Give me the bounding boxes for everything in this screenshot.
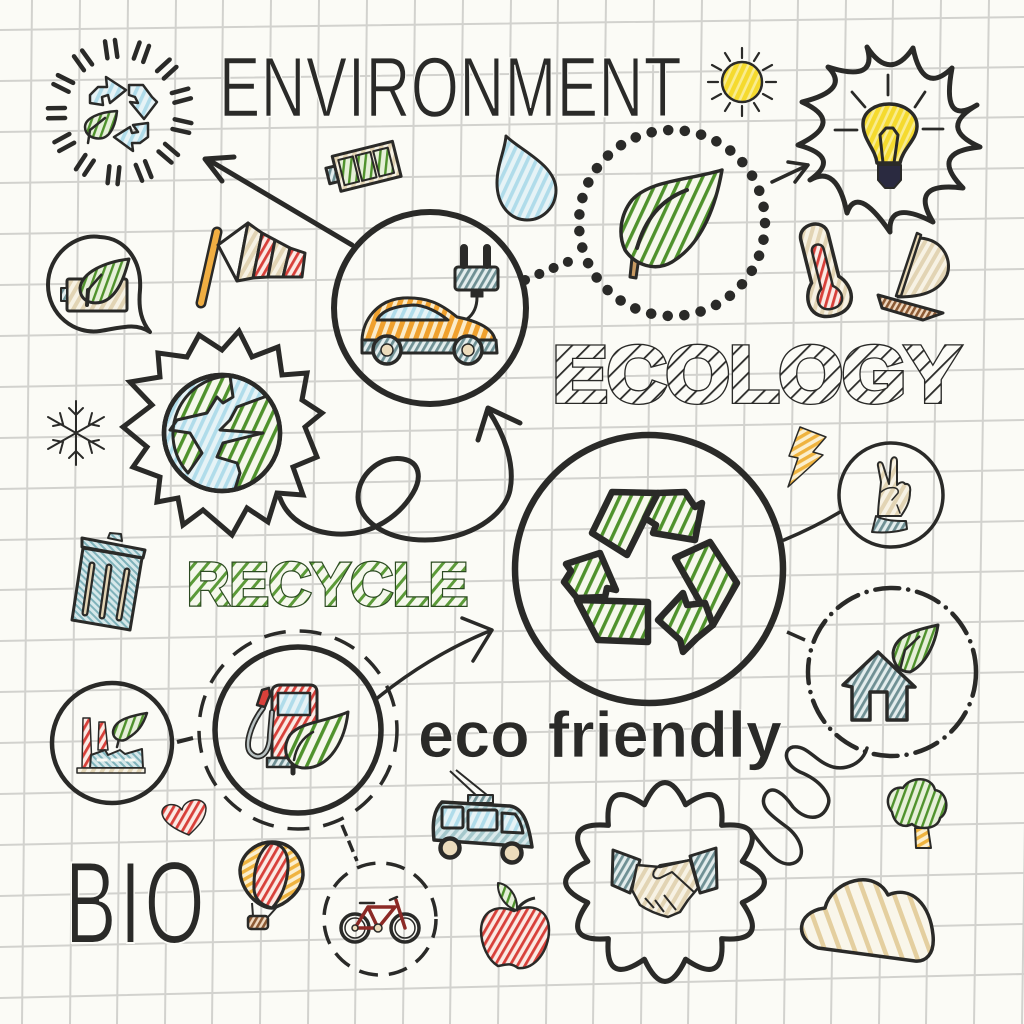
- dashed connector: recycle to house: [787, 632, 805, 640]
- icon: hot air balloon: [240, 842, 303, 929]
- dashed halo: [199, 631, 397, 829]
- dashed connector: fuel to bicycle: [342, 825, 357, 861]
- icon: heart: [162, 800, 206, 835]
- dashed connector: factory to fuel: [177, 738, 193, 742]
- icon: thermometer: [790, 219, 855, 321]
- arrow: fuel to recycle: [375, 618, 492, 700]
- title: RECYCLE: RECYCLE: [187, 551, 468, 618]
- icon: tree: [888, 779, 946, 848]
- burst outline: [798, 47, 980, 232]
- icon: cloud: [802, 880, 933, 961]
- left cuff: [612, 850, 640, 893]
- icon: windsock: [201, 223, 305, 303]
- wavy connector: house to handshake: [750, 747, 867, 864]
- icon: light bulb in burst: [798, 47, 980, 232]
- dashed circle with house: [808, 588, 976, 756]
- icon: trash can: [72, 533, 145, 630]
- circle with electric car: [334, 212, 526, 404]
- gear outline with handshake: [566, 783, 764, 981]
- circle with factory: [52, 683, 172, 803]
- circle with peace hand: [839, 443, 943, 547]
- bulb rays: [835, 75, 943, 130]
- plug: [455, 248, 498, 319]
- icon: sailboat: [878, 233, 949, 320]
- looping arrow from earth to car: [280, 408, 520, 540]
- eco friendly heading: eco friendly: [418, 698, 782, 771]
- small recycle arrows and leaf: [85, 77, 157, 151]
- bulb: [863, 104, 917, 163]
- ring of dashes: [48, 40, 191, 184]
- car body: [362, 298, 495, 340]
- leaf on house: [893, 625, 938, 672]
- icon: recycle ring top-left: [48, 40, 191, 184]
- dotted connector: car to leaf: [525, 261, 570, 280]
- icon: trolley bus: [433, 770, 532, 862]
- recycle arrows: [564, 492, 737, 652]
- car wheels: [373, 336, 401, 364]
- dotted circle with leaf: [579, 130, 765, 316]
- big circle with recycle symbol: [515, 435, 783, 703]
- house: [843, 652, 915, 720]
- right cuff: [690, 848, 717, 893]
- title: ECOLOGY: ECOLOGY: [553, 330, 960, 418]
- fuel pump: [272, 685, 317, 758]
- connector: recycle to hand: [784, 512, 840, 540]
- bicycle: [341, 914, 369, 942]
- icon: earth in spiked burst: [123, 331, 322, 535]
- heading: BIO: BIO: [65, 838, 208, 969]
- title: ECOLOGY: ECOLOGY: [553, 330, 960, 418]
- arrow to environment icon: [205, 157, 352, 245]
- icon: apple: [481, 883, 549, 968]
- leaf on pump: [290, 757, 296, 773]
- icon: snowflake: [48, 401, 104, 465]
- title: RECYCLE: RECYCLE: [187, 551, 468, 618]
- icon: sun: [708, 48, 776, 116]
- leaf: [621, 170, 722, 278]
- icon: speech bubble with battery leaf: [48, 237, 150, 332]
- hands: [632, 860, 698, 917]
- factory building: [82, 718, 92, 768]
- icon: battery: [324, 141, 401, 193]
- circle with fuel pump: [199, 631, 397, 829]
- icon: water drop: [497, 136, 556, 220]
- arrow to light bulb: [772, 162, 808, 182]
- title: ENVIRONMENT: ENVIRONMENT: [219, 40, 682, 135]
- icon: lightning bolt: [788, 427, 826, 487]
- dashed circle with bicycle: [324, 863, 436, 975]
- factory leaf: [117, 735, 120, 747]
